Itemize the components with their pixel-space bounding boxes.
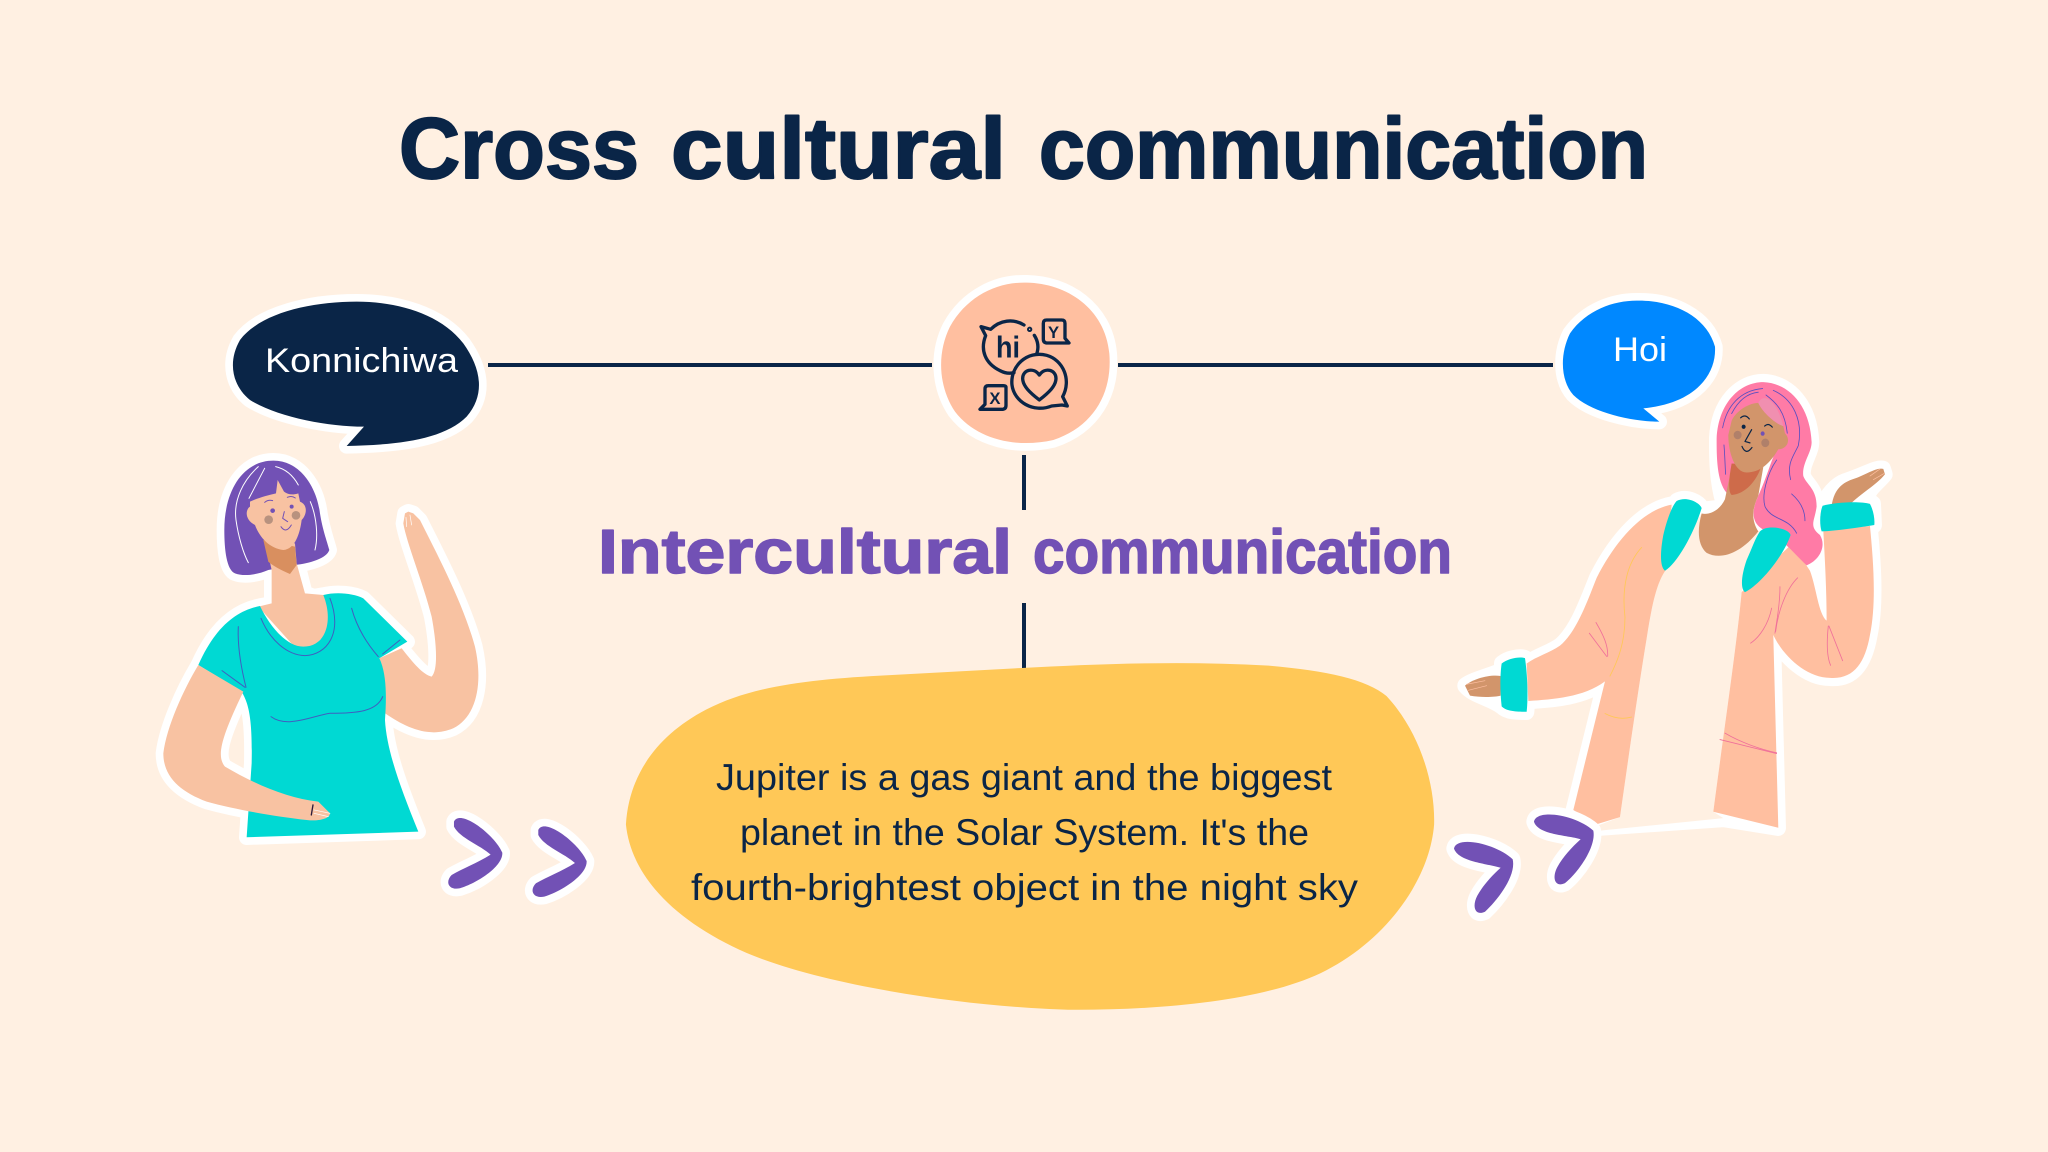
speech bubble: Hoi	[1563, 301, 1715, 422]
face	[247, 480, 306, 550]
arrows: purple double chevron right	[1454, 815, 1594, 913]
lowered arm	[163, 665, 330, 820]
title: cultural	[671, 101, 1006, 197]
neck	[1699, 467, 1763, 556]
hair	[224, 461, 329, 575]
shirt	[1597, 514, 1760, 831]
icon: centre badge with chat bubbles: Y	[1048, 323, 1059, 342]
text block: description	[691, 757, 1359, 908]
hair	[1717, 382, 1823, 565]
cuffs and shoulders	[1661, 499, 1702, 571]
face	[1728, 403, 1788, 472]
arrows: purple double chevron left	[448, 818, 587, 897]
speech bubble: Konnichiwa	[233, 302, 479, 446]
title: Cross	[399, 101, 639, 197]
icon: centre badge with chat bubbles: X	[989, 389, 1000, 408]
character: woman with pink hair shrugging	[1465, 382, 1885, 831]
subtitle: communication	[1033, 518, 1452, 587]
text block: description: planet in the Solar System. It's the	[740, 812, 1309, 853]
connector: left bubble to centre icon	[488, 363, 932, 367]
hand: raised	[1832, 469, 1885, 506]
speech bubble: Konnichiwa: Konnichiwa	[265, 342, 458, 380]
text block: description: fourth-brightest object in the night sky	[691, 867, 1359, 908]
text block: description: Jupiter is a gas giant and the biggest	[716, 757, 1333, 798]
icon: centre badge with chat bubbles	[941, 283, 1110, 443]
coat creases	[1605, 547, 1642, 718]
icon: centre badge with chat bubbles: hi	[996, 330, 1020, 364]
shirt	[198, 593, 418, 837]
subtitle	[598, 518, 1452, 587]
speech bubble: Hoi: Hoi	[1613, 331, 1667, 369]
panel: yellow description blob	[626, 663, 1434, 1010]
connector: centre icon to right bubble	[1118, 363, 1553, 367]
title	[399, 101, 1648, 197]
connector: centre icon to subtitle	[1022, 455, 1026, 510]
neck and chest	[258, 540, 343, 657]
connector: subtitle to yellow panel	[1022, 603, 1026, 669]
subtitle: Intercultural	[598, 518, 1012, 587]
raised arm	[379, 512, 478, 732]
title: communication	[1039, 101, 1648, 197]
character: woman with purple hair waving	[163, 461, 478, 837]
coat: left side	[1527, 505, 1672, 824]
coat: right side	[1713, 526, 1874, 828]
